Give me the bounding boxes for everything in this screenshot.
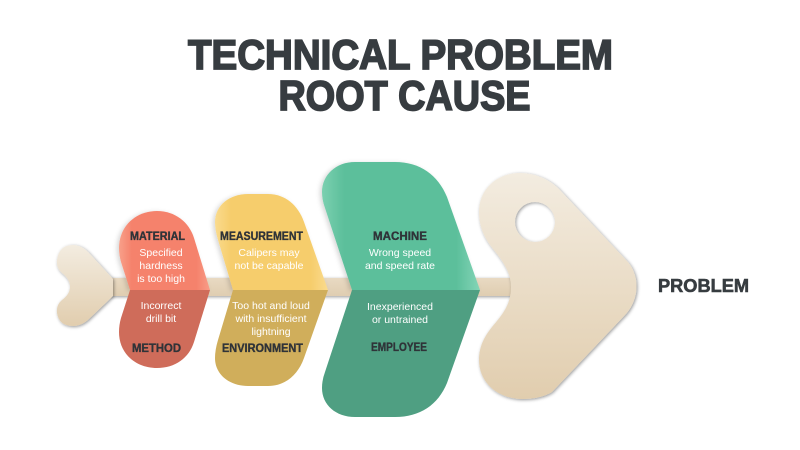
- heading: environment: ENVIRONMENT: [222, 343, 303, 355]
- method text: drill bit: [146, 313, 176, 325]
- title: TECHNICAL PROBLEM: [188, 31, 613, 78]
- heading: method: METHOD: [132, 343, 181, 355]
- machine text: and speed rate: [365, 260, 435, 272]
- environment rib: [215, 290, 328, 386]
- environment text: with insufficient: [234, 313, 307, 325]
- icon: fish tail: [57, 245, 113, 326]
- measurement text: not be capable: [235, 260, 304, 272]
- label: problem: PROBLEM: [658, 275, 749, 296]
- environment text: Too hot and loud: [232, 300, 310, 312]
- fish spine: [108, 278, 514, 296]
- icon: fish head: [479, 173, 636, 399]
- heading: material: MATERIAL: [130, 231, 185, 243]
- material text: Specified: [139, 247, 183, 259]
- machine text: Wrong speed: [369, 247, 431, 259]
- panel: machine and employee: [322, 162, 480, 417]
- machine rib: [322, 162, 480, 290]
- method text: Incorrect: [141, 300, 181, 312]
- employee rib: [322, 290, 480, 417]
- heading: employee: EMPLOYEE: [371, 342, 427, 354]
- panel: material and method: [119, 211, 210, 368]
- material text: is too high: [137, 273, 185, 285]
- title: [188, 31, 613, 119]
- title: ROOT CAUSE: [278, 72, 530, 119]
- measurement rib: [215, 194, 328, 290]
- employee text: Inexperienced: [367, 301, 433, 313]
- environment text: lightning: [251, 326, 291, 338]
- heading: measurement: MEASUREMENT: [220, 231, 303, 243]
- material text: hardness: [139, 260, 183, 272]
- panel: measurement and environment: [215, 194, 328, 386]
- material rib: [119, 211, 210, 290]
- measurement text: Calipers may: [238, 247, 300, 259]
- employee text: or untrained: [372, 314, 428, 326]
- method rib: [119, 290, 210, 368]
- heading: machine: MACHINE: [373, 231, 427, 243]
